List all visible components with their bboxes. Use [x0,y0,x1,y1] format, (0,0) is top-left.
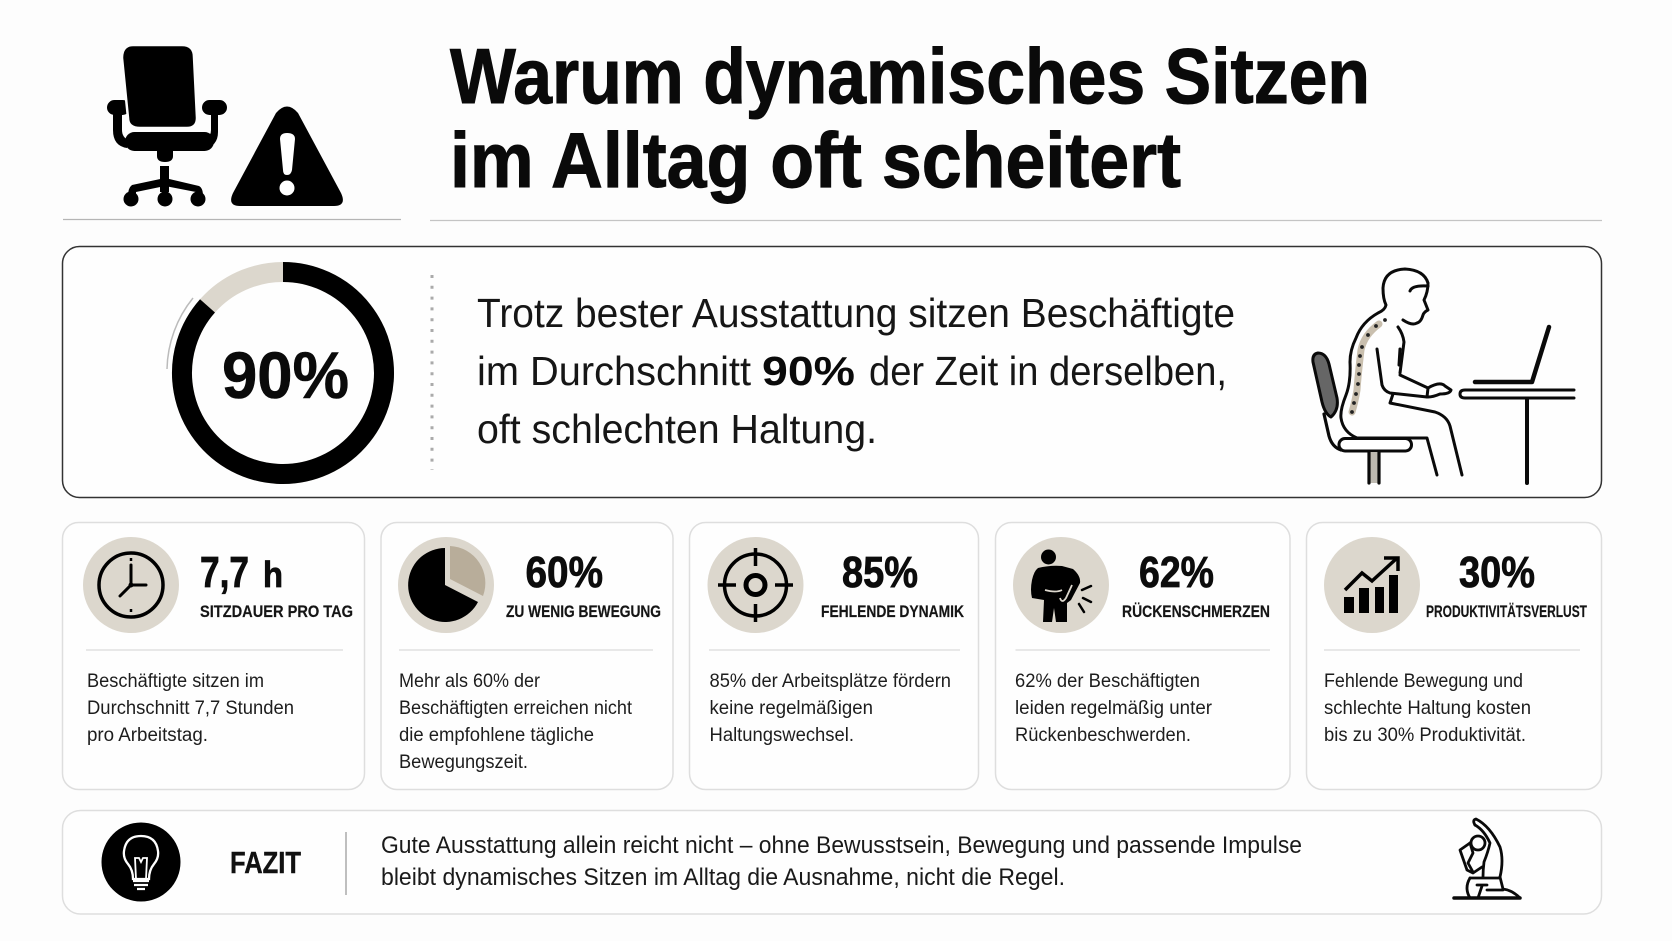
title [450,32,1370,204]
illustration: seated person at laptop [1313,269,1574,483]
chair post [1370,452,1378,483]
description: Beschäftigten erreichen nicht [399,698,633,719]
stat: h [263,554,283,595]
donut chart: 90 percent [167,272,384,474]
panel: Rückenschmerzen [996,522,1290,790]
description [1324,671,1531,746]
description: die empfohlene tägliche [399,725,594,746]
head and back [1341,269,1428,438]
donut chart: 90 percent: 90% [222,338,349,412]
card background [996,522,1290,790]
icon: target [708,537,804,633]
description [87,671,294,746]
icon: stretching figure [1454,819,1520,898]
statement text: 90% [762,348,855,394]
panel: key statement [62,246,1602,498]
description: 62% der Beschäftigten [1015,671,1200,692]
conclusion text: Gute Ausstattung allein reicht nicht – ohne Bewusstsein, Bewegung und passende Impulse [381,832,1302,859]
panel frame [62,246,1602,498]
chest [1398,327,1404,373]
statement text: im Durchschnitt [477,348,752,394]
spine highlight [1352,324,1379,412]
conclusion text [381,832,1302,891]
icon: clock [83,537,179,633]
stat: 60% [526,548,603,597]
description: bis zu 30% Produktivität. [1324,725,1526,746]
card background [1306,522,1602,790]
stat label: PRODUKTIVITÄTSVERLUST [1426,602,1587,621]
icon: pie chart [398,537,494,633]
panel frame [62,810,1602,914]
stat: 85% [842,548,918,597]
heading: FAZIT [230,845,301,880]
icon: bar chart with arrow [1324,537,1420,633]
statement text: der Zeit in derselben, [869,348,1227,394]
arm [1377,349,1428,397]
panel: Produktivitätsverlust [1306,522,1602,790]
panel: Fehlende Dynamik [690,522,978,790]
statement text [477,290,1235,452]
stat label: ZU WENIG BEWEGUNG [506,602,661,621]
legs [1390,394,1462,475]
panel: Fazit [62,810,1602,914]
title: Warum dynamisches Sitzen [450,32,1370,120]
description: Rückenbeschwerden. [1015,725,1191,746]
description [399,671,633,773]
icon: person with back pain [1013,537,1109,633]
description: Durchschnitt 7,7 Stunden [87,698,294,719]
stat: 7,7 [200,548,249,597]
description [710,671,951,746]
card background [381,522,673,790]
description: Beschäftigte sitzen im [87,671,264,692]
title: im Alltag oft scheitert [450,116,1181,204]
chair backrest [1313,353,1337,417]
card background [62,522,364,790]
statement text: oft schlechten Haltung. [477,406,877,452]
description: pro Arbeitstag. [87,725,208,746]
stat label: SITZDAUER PRO TAG [200,602,353,621]
description: 85% der Arbeitsplätze fördern [710,671,951,692]
icon: warning triangle [231,106,343,206]
description: Mehr als 60% der [399,671,541,692]
header rule left [63,218,401,220]
description: leiden regelmäßig unter [1015,698,1213,719]
header rule right [430,220,1602,222]
description: Fehlende Bewegung und [1324,671,1523,692]
icon: light bulb [102,822,180,902]
laptop [1475,327,1549,382]
conclusion text: bleibt dynamisches Sitzen im Alltag die Ausnahme, nicht die Regel. [381,864,1065,891]
card background [690,522,978,790]
panel: Zu wenig Bewegung [381,522,673,790]
icon: office chair [107,45,227,206]
desk [1460,390,1574,398]
statement text: Trotz bester Ausstattung sitzen Beschäftigte [477,290,1235,336]
description: Haltungswechsel. [710,725,854,746]
description: keine regelmäßigen [710,698,873,719]
panel: Sitzdauer [62,522,364,790]
stat label: FEHLENDE DYNAMIK [821,602,965,621]
description: schlechte Haltung kosten [1324,698,1531,719]
stat: 62% [1139,548,1214,597]
description [1015,671,1213,746]
chair seat [1339,438,1412,451]
dotted divider [430,275,434,470]
description: Bewegungszeit. [399,752,528,773]
stat label: RÜCKENSCHMERZEN [1122,602,1270,621]
stat: 30% [1459,548,1535,597]
